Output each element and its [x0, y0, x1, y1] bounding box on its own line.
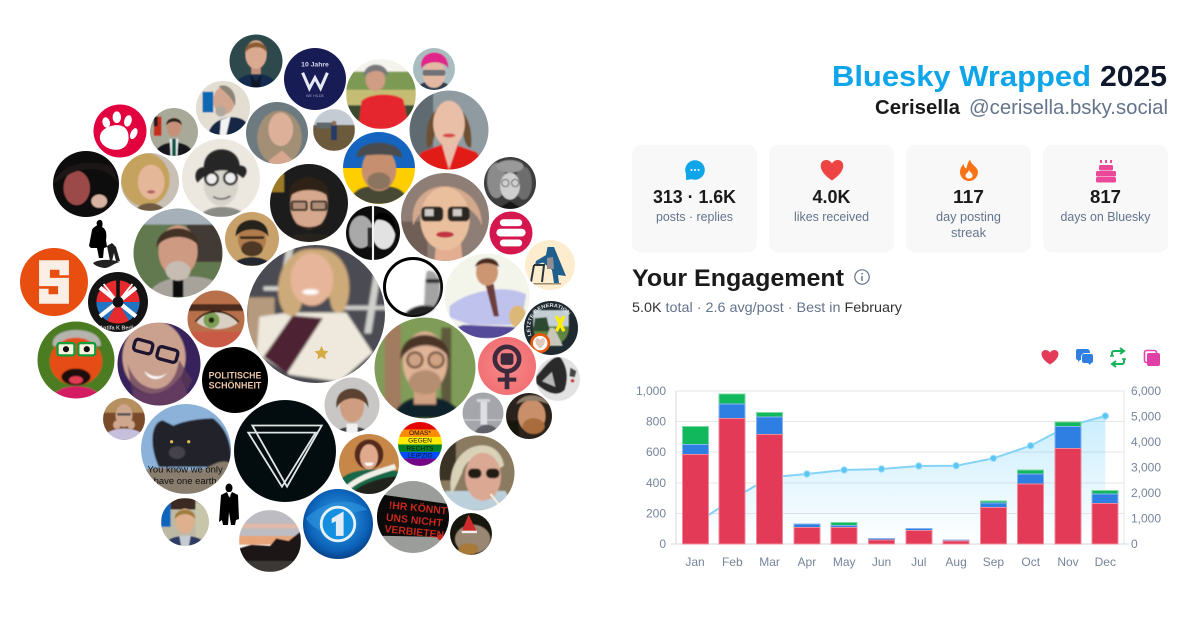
avatar: 10 Jahre W logo	[283, 47, 347, 111]
icon: quotes	[1144, 350, 1160, 366]
avatar: bearded man with cap	[505, 392, 553, 440]
bar: May	[831, 522, 857, 544]
bar: Dec	[1092, 490, 1118, 544]
avatar: black panther with caption: You know we only	[147, 464, 223, 475]
stat card: likes	[769, 145, 894, 252]
icon: replies	[1076, 349, 1093, 365]
stat card: days on Bluesky	[1043, 145, 1168, 252]
avatar: protest banner	[376, 480, 450, 554]
avatar: woman in red jacket	[408, 89, 490, 171]
stat card: streak: day posting	[936, 210, 1001, 224]
avatar: black ring with greyscale face	[384, 258, 442, 316]
icon: like	[1042, 350, 1058, 364]
avatar: eye close-up	[186, 289, 246, 349]
avatar: split black and white dog and woman	[345, 205, 401, 261]
icon: reposts	[1110, 348, 1126, 367]
avatar: red and blue antifascist badge: Antifa K Berlin	[99, 326, 137, 332]
avatar: protest banner: !HR KÖNNT	[388, 498, 448, 518]
left axis labels: 600	[646, 445, 666, 459]
month labels: Jul	[911, 555, 926, 569]
avatar: ink black and white artwork	[535, 356, 581, 402]
engagement chart	[636, 384, 1161, 569]
avatar: man in shirt and tie lying on sofa	[443, 252, 531, 340]
bar: Jan	[682, 426, 708, 544]
avatar: man with curly hair on grey	[323, 376, 381, 434]
avatar: Omas gegen Rechts rainbow logo: RECHTS	[406, 446, 434, 453]
avatar: person in field	[313, 109, 355, 151]
avatar: woman with long blonde hair	[245, 101, 309, 165]
heading: Your Engagement: Your Engagement	[632, 265, 844, 292]
bar: Apr	[794, 524, 820, 544]
avatar: man in red shirt in field	[346, 59, 416, 129]
avatar: feminist fist symbol	[477, 336, 537, 396]
avatar: Omas gegen Rechts rainbow logo: LEIPZIG	[407, 453, 433, 460]
avatar: woman with curly blonde hair	[120, 152, 180, 212]
title: 2025	[1100, 61, 1167, 93]
cumulative area	[695, 416, 1105, 544]
title: Bluesky Wrapped	[832, 61, 1091, 93]
user name and handle	[875, 97, 1168, 119]
icon: flame	[960, 160, 978, 181]
avatar: painted bearded man	[224, 211, 280, 267]
avatar: person with pink hair	[413, 48, 455, 90]
right axis labels: 0	[1131, 537, 1138, 551]
month labels: Oct	[1021, 555, 1041, 569]
avatar: silhouette of man in suit	[219, 484, 239, 525]
avatar: hedgehog with party hat	[449, 512, 493, 556]
avatar: man with flat cap on Ukrainian colours	[343, 132, 415, 204]
icon: speech bubble	[685, 160, 705, 180]
user name and handle: Cerisella	[875, 97, 961, 119]
right axis labels: 1,000	[1131, 512, 1161, 526]
month labels: Sep	[983, 555, 1004, 569]
right axis labels: 3,000	[1131, 460, 1161, 474]
icon: heart	[821, 160, 843, 180]
avatar: smiling man in grey jacket	[132, 207, 224, 299]
bar: Mar	[756, 412, 782, 544]
right axis labels: 6,000	[1131, 384, 1161, 398]
avatar: man on teal background	[230, 34, 282, 88]
avatar: silhouette of person with dog	[89, 220, 120, 268]
avatar: orange muppet with green glasses	[36, 320, 116, 400]
left axis labels: 400	[646, 476, 666, 490]
month labels: Mar	[759, 555, 780, 569]
avatar: Letzte Generation badge: LETZTE GENERATION	[526, 303, 571, 336]
avatar: protest banner: UNS NICHT	[385, 513, 444, 530]
avatar: man with glasses in forest	[372, 315, 478, 421]
stacked bars	[682, 394, 1118, 544]
avatar: Omas gegen Rechts rainbow logo	[398, 422, 442, 466]
stat card: likes: likes received	[794, 210, 869, 224]
month labels: May	[833, 555, 856, 569]
bar: Jul	[906, 528, 932, 544]
month labels: Dec	[1095, 555, 1116, 569]
avatar: Omas gegen Rechts rainbow logo: OMAS*	[409, 430, 431, 437]
left axis labels: 1,000	[636, 384, 666, 398]
right axis labels: 2,000	[1131, 486, 1161, 500]
avatar: man in suit, profile with glasses	[195, 80, 251, 136]
avatar: inverted triangles logo	[232, 398, 338, 504]
avatar: large photo of blonde woman in white fleece	[244, 242, 388, 386]
avatar: sketch of man with bowler hat and round glasses	[180, 137, 262, 219]
avatar: red round logo with white bars	[489, 211, 533, 255]
month labels: Jan	[685, 555, 705, 569]
user name and handle: @cerisella.bsky.social	[969, 97, 1168, 119]
engagement summary: 5.0K total · 2.6 avg/post · Best in February	[632, 299, 902, 315]
grid lines	[671, 391, 1129, 544]
avatar: red and blue antifascist badge	[87, 271, 149, 333]
bar: Jun	[868, 538, 894, 544]
left axis labels: 800	[646, 414, 666, 428]
avatar: 10 Jahre W logo: WE HILDE	[306, 94, 325, 98]
avatar: woman lying on wood floor in green top	[338, 433, 400, 495]
avatar: Tagesschau blue globe	[302, 488, 374, 560]
left axis labels: 0	[659, 537, 666, 551]
avatar: Omas gegen Rechts rainbow logo: GEGEN	[408, 438, 432, 445]
stat card: streak	[906, 145, 1031, 252]
avatar: Batman with walker	[524, 239, 576, 291]
stat card: streak: 117	[953, 187, 984, 207]
right axis labels: 4,000	[1131, 435, 1161, 449]
bar: Feb	[719, 394, 745, 544]
line points	[804, 413, 1109, 477]
avatar: 10 Jahre W logo: 10 Jahre	[301, 62, 329, 69]
stat card: posts and replies	[632, 145, 757, 252]
avatar: curly grey hair portrait	[483, 156, 537, 210]
avatar: Politische Schönheit logo: SCHÖNHEIT	[209, 381, 262, 391]
month labels	[685, 555, 1116, 569]
bar: Oct	[1018, 470, 1044, 544]
bar: Nov	[1055, 422, 1081, 544]
avatar: black panther with caption: have one earth	[154, 476, 217, 487]
avatar: blonde person with sunglasses and cigarette	[438, 434, 516, 512]
icon: info	[855, 270, 869, 284]
stat card: streak: streak	[951, 226, 987, 240]
avatar: woman with dark curly hair	[52, 150, 120, 218]
avatar: man with glasses and dark background	[268, 162, 350, 244]
avatar: man in dark suit, green tie	[149, 107, 199, 157]
avatar: man with hands on chin	[102, 397, 146, 441]
right axis labels: 5,000	[1131, 410, 1161, 424]
cumulative line	[695, 416, 1105, 524]
avatar: Politische Schönheit logo: POLITISCHE	[209, 371, 261, 381]
avatar: Politische Schönheit logo	[201, 346, 269, 414]
month labels: Feb	[722, 555, 743, 569]
stat card: posts and replies: posts · replies	[656, 210, 733, 224]
avatar cluster	[20, 34, 580, 572]
bar: Sep	[980, 501, 1006, 544]
stat card: days on Bluesky: 817	[1090, 187, 1121, 207]
avatar: smiling man with glasses in purple tones	[116, 321, 202, 407]
left axis labels	[636, 384, 666, 551]
avatar: protest banner: VERBIETEN	[384, 524, 444, 541]
avatar: Letzte Generation badge	[524, 301, 578, 355]
stat card: days on Bluesky: days on Bluesky	[1060, 210, 1151, 224]
left axis labels: 200	[646, 506, 666, 520]
avatar: red round logo with white paw	[92, 103, 148, 159]
month labels: Apr	[798, 555, 816, 569]
avatar: orange circle with S logo	[19, 247, 89, 317]
stat card: posts and replies: 313 · 1.6K	[653, 187, 736, 207]
month labels: Aug	[945, 555, 967, 569]
chart legend icons	[1042, 348, 1160, 367]
bar: Aug	[943, 540, 969, 544]
right axis labels	[1131, 384, 1161, 551]
month labels: Nov	[1057, 555, 1079, 569]
avatar: woman with large sunglasses	[399, 171, 491, 263]
avatar: black panther with caption	[139, 402, 233, 496]
month labels: Jun	[872, 555, 891, 569]
stat card: likes: 4.0K	[812, 187, 850, 207]
icon: cake	[1096, 160, 1116, 182]
avatar: man in suit on news set	[160, 497, 210, 547]
avatar: sunset over trees	[239, 510, 301, 572]
avatar: grey tower illustration	[462, 392, 504, 434]
